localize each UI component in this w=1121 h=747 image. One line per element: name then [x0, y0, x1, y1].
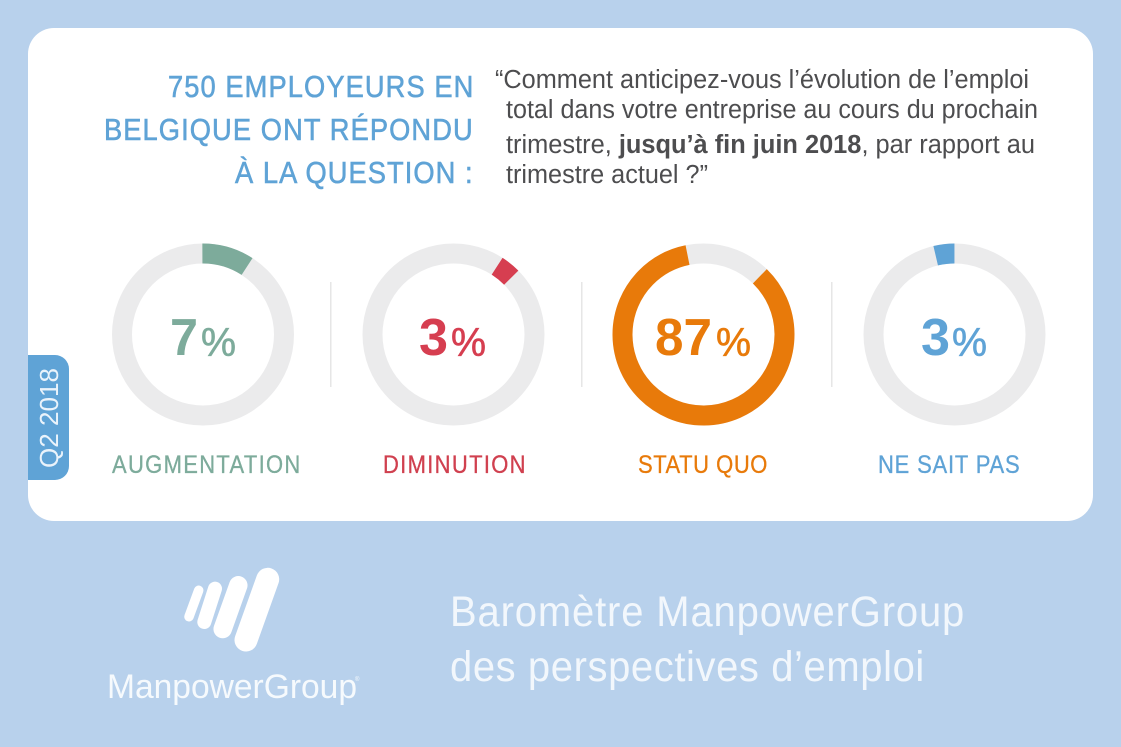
donut: diminution 3% [341, 222, 566, 478]
footer title: Baromètre ManpowerGroup [450, 587, 964, 635]
tab: quarter: Q2 2018 [34, 368, 64, 468]
donut: statu quo 87%: 87 [655, 309, 712, 367]
text block: survey question: trimestre actuel ?” [506, 161, 708, 189]
donut: statu quo 87% [589, 220, 818, 478]
donut: augmentation 7%: % [201, 321, 236, 365]
heading: respondents [104, 70, 473, 190]
donut: ne sait pas 3% [857, 237, 1052, 478]
donut: diminution 3%: % [451, 321, 486, 365]
text block: survey question: “Comment anticipez-vous l’évolution de l’emploi [495, 66, 1029, 94]
donut: augmentation 7% [112, 254, 300, 478]
panel: survey results card [28, 28, 1093, 521]
donut: diminution 3%: DIMINUTION [383, 451, 526, 478]
heading: respondents: BELGIQUE ONT RÉPONDU [104, 112, 473, 147]
logo: ManpowerGroup: ® [355, 676, 360, 683]
logo: ManpowerGroup [107, 579, 360, 706]
footer title: des perspectives d’emploi [450, 642, 924, 690]
donut: ne sait pas 3%: % [952, 321, 987, 365]
heading: respondents: 750 EMPLOYEURS EN [168, 70, 473, 104]
tab: quarter [28, 355, 69, 480]
donut: diminution 3%: 3 [419, 309, 448, 367]
donut: ne sait pas 3%: NE SAIT PAS [878, 451, 1020, 478]
text block: survey question: total dans votre entreprise au cours du prochain [506, 96, 1038, 124]
footer title [450, 587, 964, 690]
donut: augmentation 7%: AUGMENTATION [112, 451, 300, 478]
icon: four slanted bars [189, 579, 268, 640]
heading: respondents: À LA QUESTION : [235, 155, 473, 190]
donut: statu quo 87%: STATU QUO [638, 451, 767, 478]
donut: statu quo 87%: % [716, 321, 751, 365]
donut: ne sait pas 3%: 3 [921, 309, 950, 367]
wordmark: ManpowerGroup [107, 668, 357, 706]
text block: survey question [495, 66, 1038, 189]
text block: survey question: trimestre, jusqu’à fin juin 2018, par rapport au [506, 131, 1035, 159]
donut: augmentation 7%: 7 [170, 309, 198, 367]
